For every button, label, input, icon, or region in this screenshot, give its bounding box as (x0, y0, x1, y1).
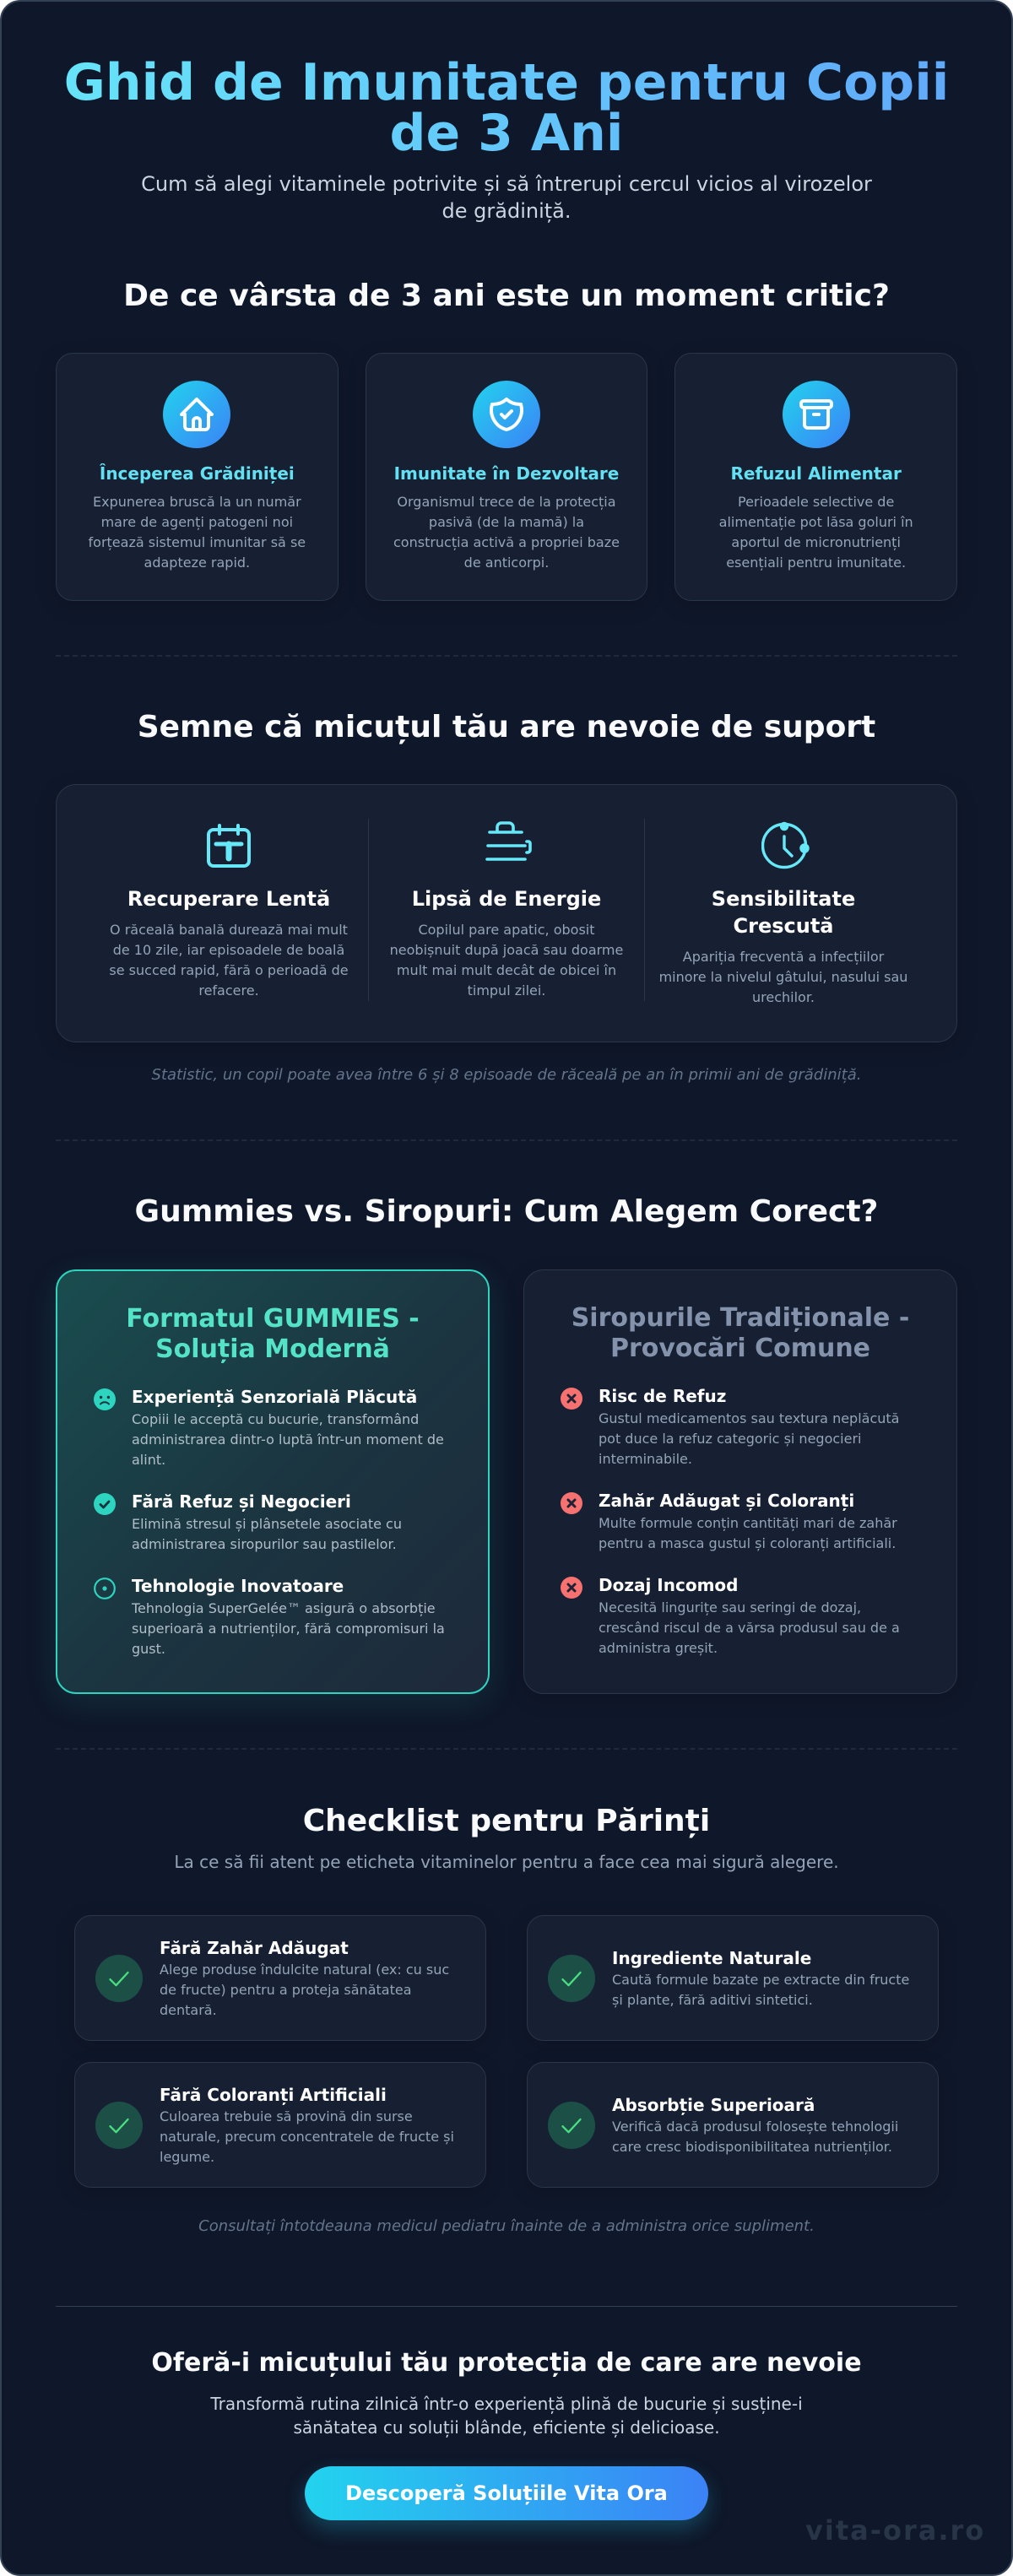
item: sensory experience (94, 1387, 444, 1468)
checklist card: natural ingredients (527, 1915, 939, 2041)
icon: face (94, 1388, 116, 1410)
title (712, 887, 855, 938)
text (659, 949, 907, 1005)
icon: x (561, 1577, 582, 1599)
card text: forțează sistemul imunitar să se (89, 534, 306, 550)
card text: pasivă (de la mamă) la (429, 514, 584, 530)
text: Verifică dacă produsul folosește tehnologii (612, 2119, 898, 2135)
statistic note: Statistic, un copil poate avea între 6 și 8 episoade de răceală pe an în primii ani de grădiniță. (152, 1066, 861, 1084)
card title: Începerea Grădiniței (100, 463, 295, 484)
text (109, 922, 349, 998)
text: urechilor. (752, 989, 815, 1005)
text: timpul zilei. (468, 982, 545, 998)
item text (132, 1516, 402, 1552)
item text: Tehnologia SuperGelée™ asigură o absorbție (132, 1600, 436, 1616)
card text: mare de agenți patogeni noi (101, 514, 293, 530)
item text: superioară a nutrienților, fără compromisuri la (132, 1621, 445, 1637)
heading: why age 3: De ce vârsta de 3 ani este un moment critic? (123, 279, 890, 313)
title: Ingrediente Naturale (612, 1948, 811, 1968)
icon: check (548, 1955, 595, 2002)
icon: check (94, 1493, 116, 1515)
item: dosing (561, 1575, 900, 1656)
text: se succed rapid, fără o perioadă de (109, 962, 349, 978)
text: de 10 zile, iar episoadele de boală (113, 942, 344, 958)
card text: construcția activă a propriei baze (393, 534, 620, 550)
item text: crescând riscul de a vărsa produsul sau de a (599, 1620, 900, 1636)
title (0, 57, 1013, 159)
item: refusal risk (561, 1386, 899, 1467)
panel heading (126, 1304, 420, 1364)
text: care cresc biodisponibilitatea nutrienților. (612, 2139, 892, 2155)
title: Crescută (733, 914, 834, 938)
item text (132, 1411, 444, 1468)
icon: x (561, 1388, 582, 1410)
title: Fără Coloranți Artificiali (160, 2085, 387, 2105)
card text: Expunerea bruscă la un număr (93, 494, 301, 510)
subtitle: de grădiniță. (442, 199, 571, 223)
panel: gummies (56, 1269, 490, 1694)
checklist card: absorption (527, 2062, 939, 2188)
item text: administra greșit. (599, 1640, 718, 1656)
text (390, 922, 623, 998)
text: naturale, precum concentratele de fructe și (160, 2129, 454, 2145)
panel heading: Provocări Comune (610, 1334, 870, 1363)
subtitle: Cum să alegi vitaminele potrivite și să întrerupi cercul vicios al virozelor (141, 172, 872, 196)
card text (393, 494, 620, 571)
card text (88, 494, 306, 571)
card text: Organismul trece de la protecția (397, 494, 616, 510)
icon: stacked cup (485, 821, 532, 861)
item title: Risc de Refuz (599, 1386, 726, 1406)
heading: call to action: Oferă-i micuțului tău protecția de care are nevoie (151, 2348, 862, 2378)
icon: clock (761, 822, 810, 869)
item text: Copiii le acceptă cu bucurie, transformând (132, 1411, 419, 1427)
sign: slow recovery (109, 824, 349, 998)
text: minore la nivelul gâtului, nasului sau (659, 969, 907, 985)
text: Culoarea trebuie să provină din surse (160, 2108, 413, 2124)
call to action text: Transformă rutina zilnică într-o experiență plină de bucurie și susține-i (210, 2394, 803, 2414)
text: legume. (160, 2149, 214, 2165)
text (160, 1962, 449, 2018)
icon: target (94, 1578, 116, 1599)
item text: Elimină stresul și plânsetele asociate cu (132, 1516, 402, 1532)
card text: de anticorpi. (464, 555, 549, 571)
icon: check (548, 2102, 595, 2149)
item text (132, 1600, 445, 1657)
text: Copilul pare apatic, obosit (418, 922, 595, 938)
sign: increased sensitivity (659, 822, 907, 1005)
item text: Multe formule conțin cantități mari de zahăr (599, 1515, 897, 1531)
item text: pot duce la refuz categoric și negocieri (599, 1431, 861, 1447)
heading: signs: Semne că micuțul tău are nevoie de suport (138, 710, 875, 744)
panel: food refusal (674, 353, 957, 601)
text (612, 1972, 909, 2008)
title: Sensibilitate (712, 887, 855, 911)
panel: syrups (523, 1269, 957, 1694)
item text: administrarea siropurilor sau pastilelor. (132, 1536, 397, 1552)
text: de fructe) pentru a proteja sănătatea (160, 1982, 412, 1998)
icon: house (163, 381, 230, 448)
card text: alimentație pot lăsa goluri în (719, 514, 913, 530)
title: Ghid de Imunitate pentru Copii (64, 53, 949, 112)
text: dentară. (160, 2002, 217, 2018)
item text: Necesită lingurițe sau seringi de dozaj, (599, 1599, 861, 1615)
item title: Fără Refuz și Negocieri (132, 1491, 351, 1512)
card text (719, 494, 913, 571)
text: Alege produse îndulcite natural (ex: cu suc (160, 1962, 449, 1978)
panel heading: Soluția Modernă (155, 1334, 390, 1364)
panel heading: Formatul GUMMIES - (126, 1304, 420, 1334)
item text: administrarea dintr-o luptă într-un moment de (132, 1431, 444, 1448)
checklist intro: La ce să fii atent pe eticheta vitaminelor pentru a face cea mai sigură alegere. (174, 1852, 839, 1872)
text (160, 2108, 454, 2165)
title: Recuperare Lentă (127, 887, 330, 911)
title: Lipsă de Energie (412, 887, 601, 911)
item text (599, 1599, 900, 1656)
item text (599, 1515, 897, 1551)
text: și plante, fără aditivi sintetici. (612, 1992, 813, 2008)
icon: check (95, 2102, 143, 2149)
card text: esențiali pentru imunitate. (726, 555, 906, 571)
icon: shield (473, 381, 540, 448)
item title: Dozaj Incomod (599, 1575, 738, 1595)
item title: Experiență Senzorială Plăcută (132, 1387, 417, 1407)
item text: gust. (132, 1641, 165, 1657)
title: de 3 Ani (390, 104, 623, 163)
heading: checklist: Checklist pentru Părinți (303, 1804, 710, 1838)
text: Apariția frecventă a infecțiilor (683, 949, 884, 965)
item text: alint. (132, 1452, 165, 1468)
item title: Tehnologie Inovatoare (132, 1576, 344, 1596)
icon: x (561, 1492, 582, 1514)
panel: starting kindergarten (56, 353, 339, 601)
checklist card: no colorants (74, 2062, 486, 2188)
item text: Gustul medicamentos sau textura neplăcută (599, 1410, 899, 1426)
item title: Zahăr Adăugat și Coloranți (599, 1491, 854, 1511)
item text: interminabile. (599, 1451, 692, 1467)
card text: aportul de micronutrienți (731, 534, 901, 550)
card text: Perioadele selective de (738, 494, 894, 510)
text (612, 2119, 898, 2155)
call to action text (210, 2394, 803, 2438)
button: Descoperă Soluțiile Vita Ora (345, 2481, 668, 2505)
watermark: vita-ora.ro (805, 2514, 985, 2546)
text: Caută formule bazate pe extracte din fructe (612, 1972, 909, 1988)
checklist card: no sugar (74, 1915, 486, 2041)
item text: pentru a masca gustul și coloranți artificiali. (599, 1535, 896, 1551)
card title: Refuzul Alimentar (730, 463, 902, 484)
heading: comparison: Gummies vs. Siropuri: Cum Alegem Corect? (135, 1194, 878, 1229)
text: refacere. (198, 982, 259, 998)
text: mult mai mult decât de obicei în (397, 962, 616, 978)
card title: Imunitate în Dezvoltare (394, 463, 619, 484)
icon: storage box (783, 381, 850, 448)
sign: lack of energy (390, 821, 623, 998)
item: added sugar (561, 1491, 897, 1551)
panel: support signs (56, 784, 957, 1042)
text: neobișnuit după joacă sau doarme (390, 942, 623, 958)
icon: check (95, 1955, 143, 2002)
title: Absorbție Superioară (612, 2095, 815, 2115)
title: Fără Zahăr Adăugat (160, 1938, 349, 1958)
panel: developing immunity (366, 353, 647, 601)
item: no refusal (94, 1491, 402, 1552)
panel heading: Siropurile Tradiționale - (572, 1303, 909, 1333)
icon: calendar (207, 824, 251, 868)
button (305, 2466, 708, 2520)
card text: adapteze rapid. (144, 555, 250, 571)
subtitle (141, 172, 872, 223)
disclaimer note: Consultați întotdeauna medicul pediatru înainte de a administra orice supliment. (198, 2217, 815, 2235)
text: O răceală banală durează mai mult (110, 922, 348, 938)
item text (599, 1410, 899, 1467)
call to action text: sănătatea cu soluții blânde, eficiente și delicioase. (293, 2417, 720, 2438)
item: technology (94, 1576, 445, 1657)
panel heading (572, 1303, 909, 1363)
